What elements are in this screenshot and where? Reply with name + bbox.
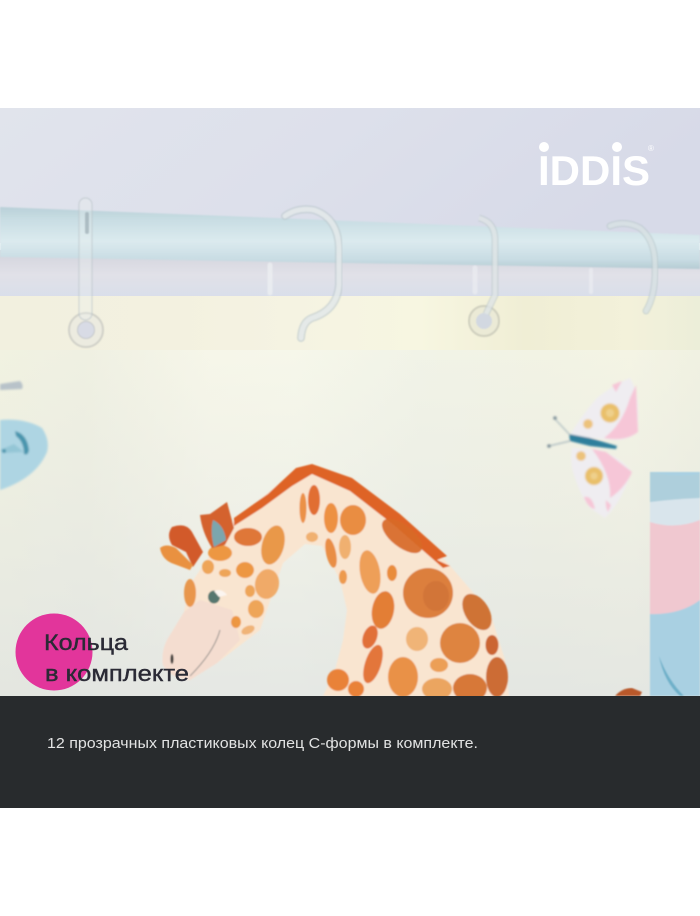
photo: curtain on rod xyxy=(0,108,700,696)
giraffe ear xyxy=(200,502,234,548)
feature heading: в комплекте xyxy=(45,661,189,686)
shower ring 3 with eyelet xyxy=(469,218,499,336)
giraffe ossicones xyxy=(169,525,203,567)
wall behind the rod xyxy=(0,108,700,243)
giraffe body and neck xyxy=(162,466,509,696)
giraffe snout xyxy=(162,600,240,680)
orange paw fragment xyxy=(615,688,642,696)
giraffe mane xyxy=(234,464,450,568)
caption text: 12 прозрачных пластиковых колец С-формы в комплекте. xyxy=(47,735,478,752)
dark caption band xyxy=(0,696,700,808)
shower ring 4 xyxy=(591,223,655,311)
strip under the rod xyxy=(0,250,700,300)
logo: IDDIS: IDDIS xyxy=(538,147,650,194)
curtain body xyxy=(0,350,700,696)
butterfly xyxy=(547,378,638,518)
logo: IDDIS: ® xyxy=(648,144,654,153)
curtain rod xyxy=(0,207,700,269)
giraffe eye xyxy=(208,590,227,604)
giraffe smile and nostril xyxy=(170,630,220,676)
watercolor animal on the right xyxy=(650,472,700,696)
pink accent circle xyxy=(16,614,92,690)
curtain lower shading xyxy=(0,350,700,696)
left watercolor shape xyxy=(0,381,48,490)
curtain hem xyxy=(0,296,700,352)
shower ring 2 xyxy=(270,209,339,338)
shower ring 1 with eyelet xyxy=(69,198,103,347)
giraffe spots xyxy=(184,485,508,702)
feature heading xyxy=(44,630,189,686)
feature heading: Кольца xyxy=(44,630,129,655)
giraffe illustration xyxy=(160,464,509,702)
